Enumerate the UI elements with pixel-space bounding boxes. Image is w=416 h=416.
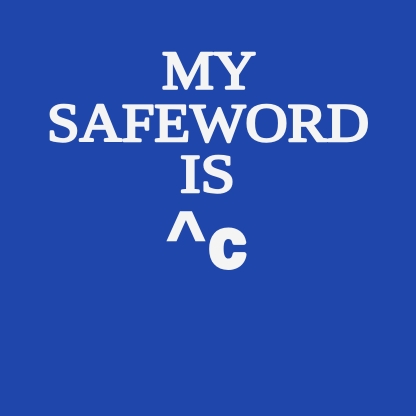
control-C symbol: [167, 200, 248, 288]
letter c: c: [208, 210, 248, 288]
line: IS: IS: [180, 144, 235, 204]
line: SAFEWORD: SAFEWORD: [47, 93, 369, 153]
caret: ^: [167, 200, 205, 270]
line: MY: MY: [162, 40, 256, 100]
slogan heading: [47, 40, 369, 204]
